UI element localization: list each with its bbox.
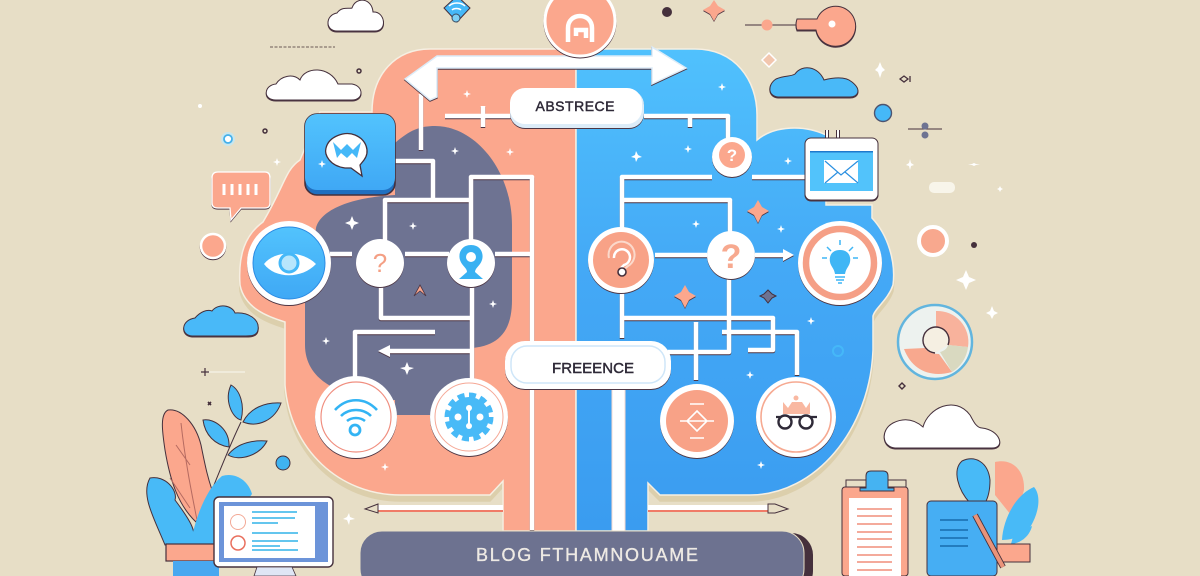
pencil right [648,504,788,513]
top circle badge [545,0,615,56]
accent: dark diamond [760,290,776,303]
node: question top right [712,137,752,177]
icon: mail calendar card [805,130,878,200]
node: lightbulb [798,221,882,305]
node: coral diamond circle [660,384,734,458]
panel: blue right half [576,49,894,531]
node: white question [707,231,755,279]
cloud: blue right [770,68,858,97]
leaf: coral [162,410,212,522]
heading pill: FREEENCE [505,341,671,389]
bottom title bar [360,531,813,576]
node: glasses circle [756,377,836,457]
flow lines: left [330,94,532,530]
panel: coral left half [240,49,576,531]
node: coral question [588,227,654,293]
bottom title bar: BLOG FTHAMNOUAME [476,545,698,565]
icon: key connector [745,6,856,46]
node: question left [356,239,404,287]
icon: chat card [305,114,395,195]
small pie chart [898,305,972,379]
heading pill: FREEENCE: FREEENCE [552,360,634,377]
icon: small chevron [414,285,426,296]
icon: badge glyph [568,16,592,42]
node: gear circle [430,378,508,456]
top double arrow [405,47,686,100]
heading pill: ABSTRECE: ABSTRECE [536,98,614,114]
icon: speech bubble [212,172,270,220]
flow lines: right [622,116,806,380]
node: white question: ? [721,238,741,276]
clipboard [842,471,908,576]
sparkles [273,62,1003,525]
notebook [927,501,997,576]
cloud: blue left [184,306,258,336]
node: wifi circle [315,376,397,458]
pencil left [365,504,503,513]
decorative circle left [201,234,225,258]
decorative dots and small marks [198,7,977,470]
node: pin icon [447,239,495,287]
cloud: top white [328,0,383,31]
node: question top right: ? [727,146,737,165]
dashed decoration [270,46,335,48]
node: question left: ? [373,248,387,278]
accent diamonds [674,0,769,308]
icon: blue pin marker [221,132,235,146]
monitor [214,497,333,576]
heading pill: ABSTRECE [510,88,644,128]
left plant [147,385,281,576]
panel: dark slate region [305,126,512,415]
center vertical bar [612,385,625,531]
icon: wifi diamond [444,0,470,22]
pen [975,515,1003,567]
cloud: white right [884,405,1000,448]
pot [166,544,223,561]
right plant and notebook [927,459,1038,576]
icon: eye circle [247,221,331,305]
leaf: blue large [147,478,194,545]
cloud: upper left white [266,70,361,100]
